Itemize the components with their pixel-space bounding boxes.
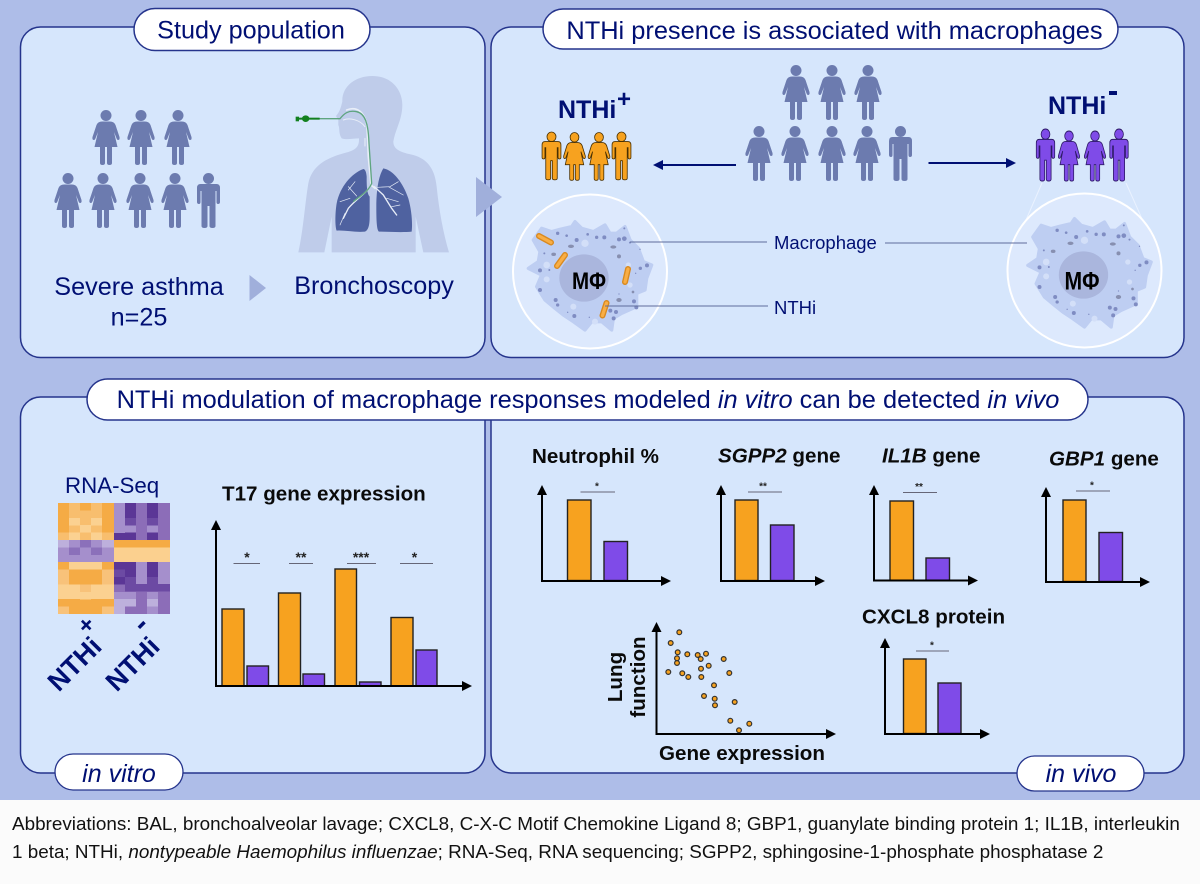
bar chart: IL1B: ** <box>915 482 923 493</box>
arrow: to NTHi negative <box>928 158 1016 168</box>
icon: severe asthma patient group <box>54 110 220 228</box>
bar chart: CXCL8: * <box>930 640 934 652</box>
icon: macrophage with NTHi <box>513 194 667 348</box>
panel: in vivo <box>491 397 1184 791</box>
bar chart: T17 gene expression: * <box>412 549 418 565</box>
panel: study population <box>20 8 485 358</box>
label pill: in vivo: in vivo <box>1046 760 1117 788</box>
heading pill: NTHi presence: NTHi presence is associated with macrophages <box>566 17 1103 45</box>
label: severe asthma n=25: n=25 <box>111 304 167 332</box>
bar chart: IL1B <box>869 482 978 586</box>
icon: macrophage with NTHi: MΦ <box>572 268 606 295</box>
arrow: to NTHi positive <box>653 160 736 170</box>
bar chart: GBP1 <box>1041 480 1150 587</box>
bar chart: GBP1: * <box>1090 480 1094 492</box>
label: NTHi+: NTHi <box>558 96 616 124</box>
heading pill: NTHi presence <box>543 9 1118 49</box>
axis label: lung function: Lung <box>604 652 627 702</box>
arrow: study population to NTHi analysis <box>476 177 502 217</box>
zoom guide lines <box>1013 183 1156 250</box>
icon: patient group <box>745 65 912 181</box>
footer: abbreviations: 1 beta; NTHi, nontypeable Haemophilus influenzae; RNA-Seq, RNA sequencing; SGPP2, sphingosine-1-phosphate phosphatase 2 <box>12 841 1103 862</box>
icon: bronchoscopy through torso and lungs <box>296 76 449 252</box>
heading pill: study population <box>134 8 370 50</box>
heading pill: NTHi modulation <box>87 379 1088 420</box>
heading pill: study population: Study population <box>157 16 345 44</box>
bar chart: T17 gene expression: * <box>244 549 250 565</box>
label: NTHi+ rotated: NTHi <box>42 631 108 697</box>
chart title: Neutrophil %: Neutrophil % <box>532 445 659 468</box>
bar chart: T17 gene expression: ** <box>296 549 307 565</box>
heading pill: NTHi modulation: NTHi modulation of macrophage responses modeled in vitro can be detected in vivo <box>117 386 1059 414</box>
axis label: lung function: function <box>627 636 650 718</box>
chart title: IL1B gene: IL1B gene <box>882 444 980 468</box>
scatter plot: lung function vs gene expression <box>652 622 836 739</box>
icon: NTHi positive patients <box>542 132 631 180</box>
label: NTHi-: NTHi <box>1048 92 1106 120</box>
panel: in vitro <box>20 397 485 790</box>
label: NTHi+ rotated <box>29 611 116 697</box>
bar chart: SGPP2: ** <box>759 482 767 492</box>
chart title: GBP1 gene: GBP1 gene <box>1049 448 1159 470</box>
callout: NTHi label and leader line: NTHi <box>774 297 816 318</box>
bar chart: Neutrophil <box>537 482 671 586</box>
label: RNA-Seq: RNA-Seq <box>65 473 159 498</box>
label pill: in vitro <box>55 754 183 790</box>
label: bronchoscopy: Bronchoscopy <box>294 272 454 300</box>
bar chart: CXCL8 <box>880 638 990 739</box>
heatmap <box>58 503 170 614</box>
bar chart: T17 gene expression: *** <box>353 549 370 565</box>
label: NTHi+ rotated: + <box>72 611 101 640</box>
chart title: CXCL8 protein: CXCL8 protein <box>862 606 1005 628</box>
axis label: gene expression: Gene expression <box>659 742 825 765</box>
icon: macrophage without NTHi <box>1008 194 1162 348</box>
bar chart: T17 gene expression <box>211 520 472 691</box>
label: severe asthma n=25: Severe asthma <box>54 273 224 301</box>
label: NTHi- rotated: NTHi <box>100 631 166 697</box>
bar chart: SGPP2 <box>716 482 825 586</box>
chart title: T17 gene expression: T17 gene expression <box>222 482 426 506</box>
label pill: in vivo <box>1017 756 1144 791</box>
panel: NTHi presence is associated with macrophages <box>491 9 1184 358</box>
icon: macrophage without NTHi: MΦ <box>1064 268 1100 296</box>
chart title: SGPP2 gene: SGPP2 gene <box>718 444 840 468</box>
arrow: to bronchoscopy <box>250 275 266 301</box>
bar chart: Neutrophil: * <box>595 482 599 492</box>
axis label: lung function <box>604 636 650 718</box>
footer: abbreviations <box>0 800 1200 884</box>
footer: abbreviations: Abbreviations: BAL, bronchoalveolar lavage; CXCL8, C-X-C Motif Chemokine Ligand 8; GBP1, guanylate binding protein 1; IL1B, interleukin <box>12 813 1180 834</box>
callout: macrophage label and leader lines: Macrophage <box>774 232 877 253</box>
label: NTHi+ <box>558 86 631 124</box>
icon: NTHi negative patients <box>1036 129 1128 181</box>
label pill: in vitro: in vitro <box>82 760 156 788</box>
label: NTHi+: + <box>617 86 631 113</box>
